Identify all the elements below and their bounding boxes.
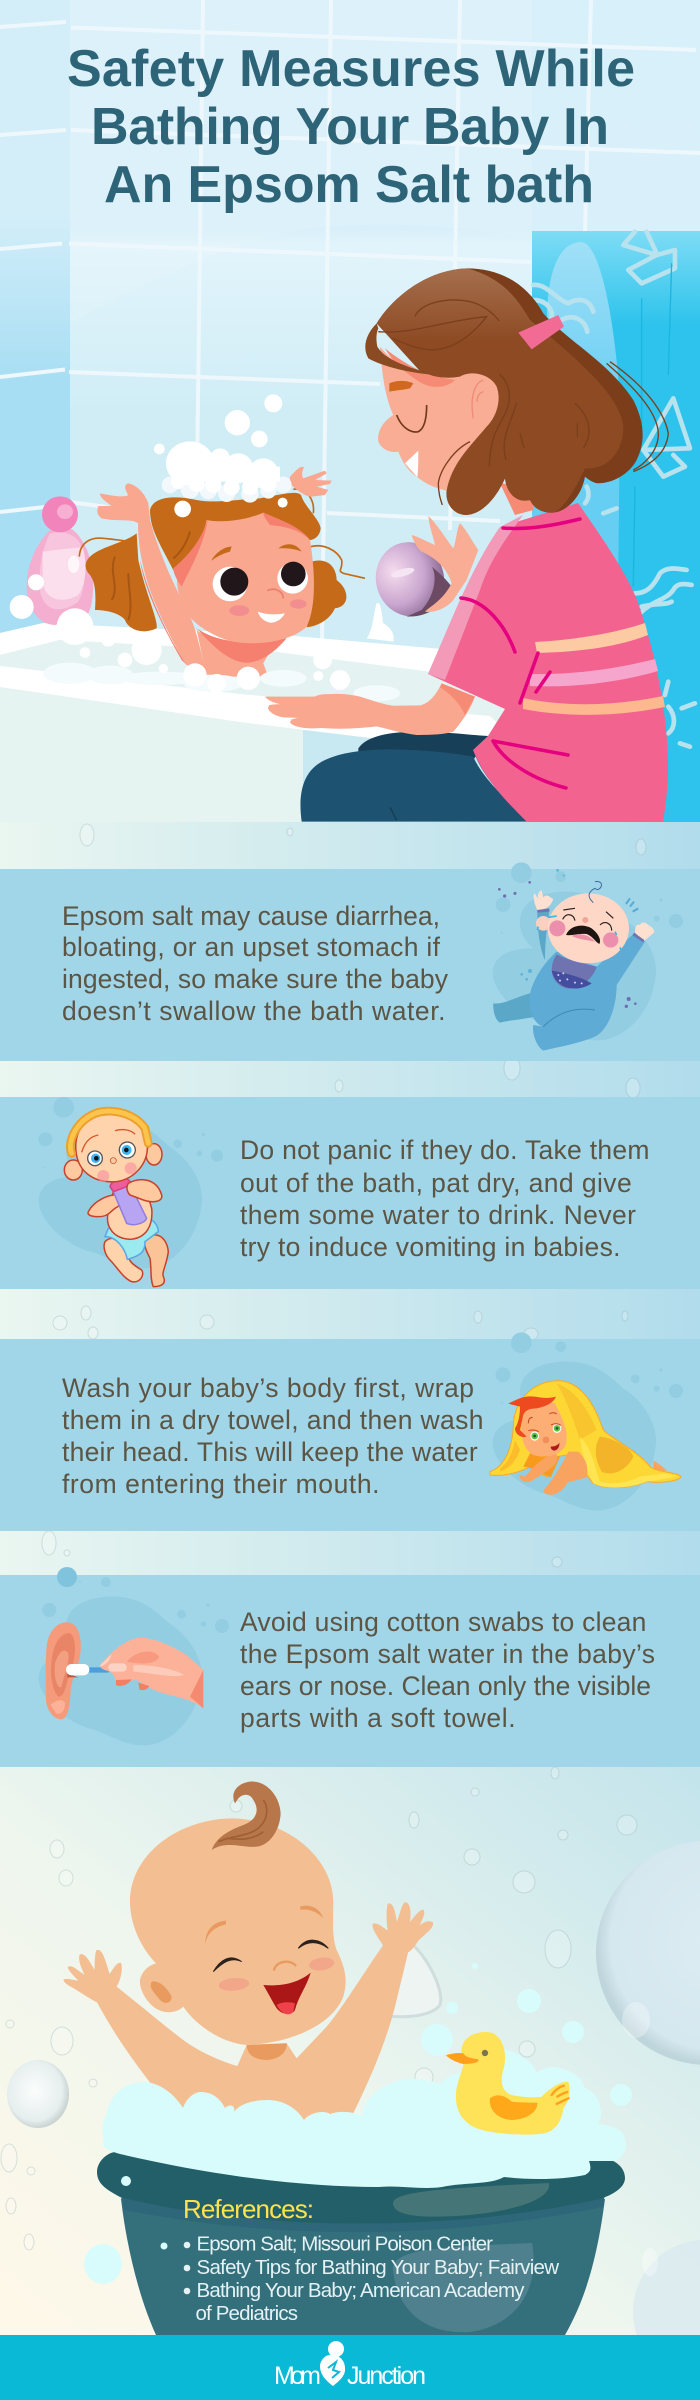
text block 4: parts with a soft towel.	[240, 1703, 516, 1733]
baby hair curl	[212, 1782, 281, 1850]
mother	[265, 268, 668, 822]
references: of Pediatrics	[196, 2302, 298, 2325]
text block 3: Wash your baby’s body first, wrap	[62, 1373, 474, 1403]
logo: MomJunction: Mom	[274, 2362, 321, 2390]
child face features	[213, 567, 247, 601]
references: Bathing Your Baby; American Academy	[196, 2279, 525, 2302]
text block 1	[62, 901, 449, 1026]
baby hands	[64, 1903, 433, 2002]
footer	[0, 2335, 700, 2400]
text block 2	[240, 1135, 650, 1262]
foam in basin	[102, 2049, 626, 2188]
child face	[177, 513, 314, 643]
mother arm and hand	[265, 683, 475, 735]
hair clip	[518, 315, 564, 349]
basin	[97, 2152, 625, 2335]
text block 2: try to induce vomiting in babies.	[240, 1232, 620, 1262]
logo: MomJunction	[274, 2341, 426, 2390]
curtain	[532, 231, 700, 822]
baby arms and torso	[97, 1945, 408, 2127]
blob and dots behind bottle baby	[38, 1097, 223, 1268]
child hair	[79, 489, 365, 631]
mother hand with bomb	[412, 516, 478, 612]
water droplets	[1, 824, 646, 2250]
icon: baby under towel	[490, 1381, 681, 1495]
text block 4: the Epsom salt water in the baby’s	[240, 1639, 655, 1669]
text block 2: out of the bath, pat dry, and give	[240, 1168, 632, 1198]
pants	[300, 732, 550, 822]
reference bullets	[160, 2242, 190, 2294]
text block 3: from entering their mouth.	[62, 1469, 380, 1499]
panel: band 1	[0, 862, 700, 1061]
text block 3: their head. This will keep the water	[62, 1437, 478, 1467]
foam on head	[162, 477, 292, 503]
icon: baby with bottle	[64, 1111, 168, 1287]
text block 1: Epsom salt may cause diarrhea,	[62, 901, 440, 931]
text block 4: ears or nose. Clean only the visible	[240, 1671, 651, 1701]
background: middle section	[0, 822, 700, 1767]
soap bubbles	[7, 1841, 700, 2384]
bathtub	[0, 623, 520, 822]
child arm and hands	[97, 467, 332, 673]
mother face	[378, 347, 499, 491]
panel: band 3	[0, 1332, 700, 1531]
tub foam	[43, 603, 400, 729]
text block 1: doesn’t swallow the bath water.	[62, 996, 446, 1026]
blob and dots behind crying baby	[493, 862, 683, 1040]
text block 2: Do not panic if they do. Take them	[240, 1135, 650, 1165]
text block 2: them some water to drink. Never	[240, 1200, 636, 1230]
mother hair	[377, 268, 643, 515]
icon: crying baby	[493, 882, 654, 1051]
references: References:	[183, 2194, 314, 2224]
panel: band 4	[0, 1567, 700, 1767]
references: Safety Tips for Bathing Your Baby; Fairview	[196, 2256, 559, 2279]
circle above ear	[57, 1567, 77, 1587]
child in bath	[79, 394, 365, 677]
title: Safety Measures While	[67, 40, 635, 98]
laughing baby	[64, 1782, 433, 2127]
bath bomb	[367, 534, 452, 624]
text block 1: ingested, so make sure the baby	[62, 964, 449, 994]
shirt	[428, 503, 668, 822]
blob and dots behind ear	[39, 1581, 229, 1745]
text block 3: them in a dry towel, and then wash	[62, 1405, 484, 1435]
references: Epsom Salt; Missouri Poison Center	[196, 2232, 493, 2256]
text block 1: bloating, or an upset stomach if	[62, 932, 441, 962]
baby face	[205, 1906, 323, 1945]
mother neck	[500, 483, 533, 515]
text block 3	[62, 1373, 484, 1499]
text block 4: Avoid using cotton swabs to clean	[240, 1607, 646, 1637]
text block 4	[240, 1607, 655, 1733]
title: Bathing Your Baby In	[91, 98, 609, 156]
title	[67, 40, 635, 214]
small circle above ear	[101, 1577, 111, 1587]
blob and dots behind towel baby	[493, 1332, 683, 1510]
logo: MomJunction: Junction	[347, 2362, 426, 2390]
panel: band 2	[0, 1097, 700, 1289]
rubber duck	[446, 2032, 570, 2135]
baby head	[130, 1818, 346, 2045]
background: lower section	[0, 1767, 700, 2335]
child body	[197, 630, 277, 677]
panel: hero bathroom scene	[0, 0, 700, 822]
icon: ear with cotton swab	[46, 1622, 203, 1719]
foam bubbles near duck	[84, 1963, 632, 2284]
references	[160, 2194, 559, 2325]
title: An Epsom Salt bath	[104, 156, 594, 214]
bottle	[10, 496, 93, 625]
